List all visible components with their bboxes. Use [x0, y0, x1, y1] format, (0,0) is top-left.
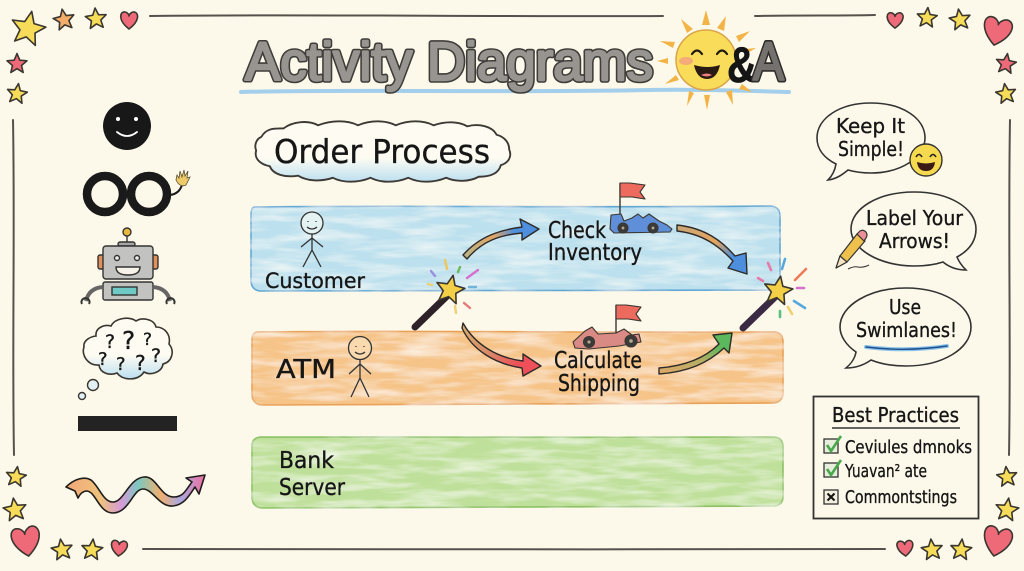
swimlane: ATM (orange): [252, 331, 783, 405]
label: Bank: Bank: [279, 448, 335, 474]
arrow: Calculate Shipping to end: [659, 333, 732, 374]
speech bubble: Keep It Simple: Simple!: [838, 137, 904, 161]
title: ampersand and A: A: [753, 32, 784, 92]
speech bubble: Keep It Simple: Keep It: [836, 114, 905, 138]
speech bubble: Label Your Arrows: Label Your: [866, 206, 964, 230]
icon: black rings with waving hand: [87, 170, 190, 212]
arrow: Check Inventory to end: [677, 225, 747, 274]
speech bubble: Label Your Arrows: Arrows!: [879, 229, 950, 253]
checklist item two: Yuavan² ate: [844, 461, 927, 482]
icon: black smiley: [103, 102, 151, 150]
title: ampersand and A: A: [753, 32, 784, 92]
title: ampersand and A: [727, 32, 784, 93]
speech bubble: Use Swimlanes: [840, 288, 971, 368]
checklist item three: Commontstings: [845, 487, 957, 508]
label: Check Inventory: [548, 218, 642, 266]
speech bubble: Keep It Simple: [817, 103, 942, 180]
icon: thought cloud with question marks: ?: [116, 354, 126, 375]
icon: pencil: [836, 230, 869, 269]
icon: thought cloud with question marks: ?: [105, 331, 115, 353]
corner decorations: bottom left: [2, 465, 128, 560]
end node: magic wand: [743, 259, 806, 328]
title: Activity Diagrams: Activity Diagrams: [245, 32, 653, 92]
icon: thought cloud with question marks: ?: [151, 345, 161, 367]
speech bubble: Label Your Arrows: [836, 192, 976, 270]
arrow: start to Calculate Shipping: [462, 323, 541, 376]
icon: smiling sun: [657, 10, 756, 110]
icon: rainbow wavy arrow: [66, 475, 205, 513]
icon: ATM stick figure: [348, 336, 372, 397]
icon: thought cloud with question marks: [78, 318, 172, 400]
title underline: [241, 90, 789, 92]
heading cloud: Order Process: [255, 121, 510, 182]
swimlane: Bank Server (green): [252, 437, 783, 508]
label: Check Inventory: Inventory: [548, 240, 642, 266]
checklist item two: [824, 460, 927, 482]
heading: Best Practices: Best Practices: [832, 403, 959, 427]
icon: robot: [82, 228, 174, 304]
icon: blue race car with flag: [610, 183, 672, 233]
speech bubble: Use Swimlanes: Use: [889, 295, 921, 319]
icon: thought cloud with question marks: ?: [122, 326, 135, 355]
corner decorations: top right: [887, 7, 1017, 104]
title: Activity Diagrams: Activity Diagrams: [245, 32, 653, 92]
checklist item three: [824, 487, 957, 508]
icon: red race car with flag: [573, 305, 641, 349]
icon: laughing emoji: [910, 144, 942, 176]
swimlane: Customer (blue): [251, 206, 780, 293]
corner decorations: bottom right: [897, 466, 1020, 560]
icon: thought cloud with question marks: ?: [135, 351, 146, 375]
icon: thought cloud with question marks: ?: [143, 330, 152, 350]
icon: customer stick figure: [301, 212, 323, 267]
label: Calculate Shipping: Calculate: [554, 348, 642, 374]
label: Calculate Shipping: Shipping: [558, 371, 640, 397]
label: Check Inventory: Check: [548, 218, 607, 244]
corner decorations: top left: [6, 7, 138, 104]
left column icons: [66, 102, 205, 513]
label: Server: Server: [279, 475, 345, 501]
heading cloud: Order Process: Order Process: [274, 132, 490, 171]
icon: thought cloud with question marks: ?: [98, 349, 108, 370]
arrow: start to Check Inventory: [463, 219, 539, 259]
speech bubble: Use Swimlanes: Swimlanes!: [856, 318, 957, 342]
label: Calculate Shipping: [554, 348, 642, 397]
checklist item one: Ceviules dmnoks: [845, 437, 972, 458]
panel: Best Practices checklist: [814, 396, 978, 518]
start node: magic wand: [415, 260, 478, 327]
label: Customer: Customer: [265, 269, 365, 293]
label: ATM: ATM: [276, 355, 336, 385]
title: ampersand and A: &: [727, 37, 757, 93]
icon: black bar: [78, 416, 177, 431]
